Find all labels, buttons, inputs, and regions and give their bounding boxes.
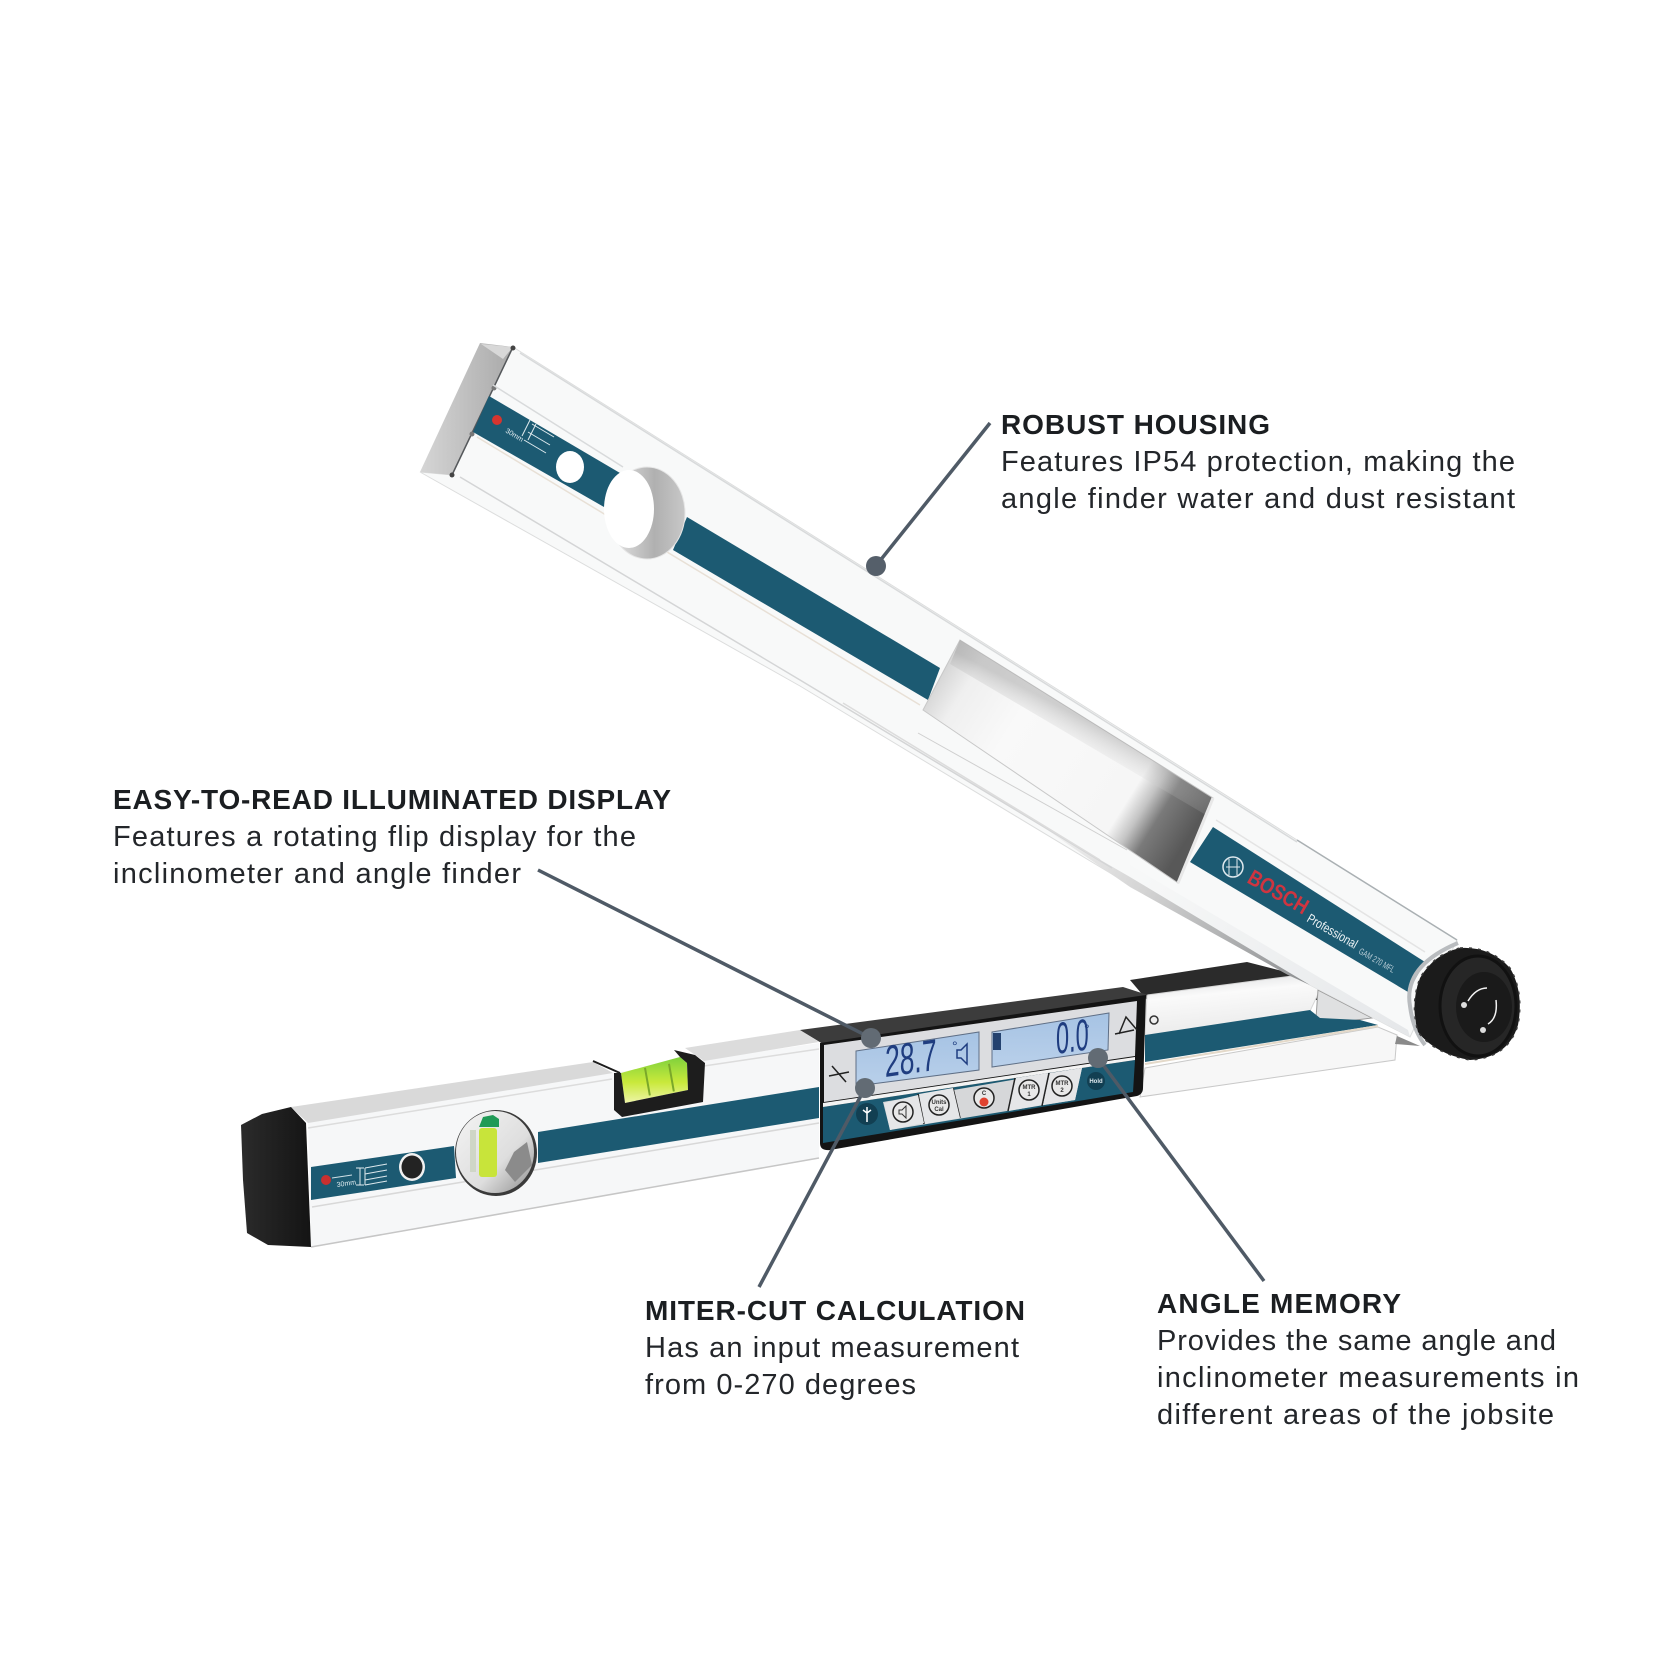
- upper arm of angle finder: [420, 343, 1520, 1060]
- arm lower face shading: [1130, 865, 1410, 1037]
- callout line: angle memory: [1088, 1048, 1264, 1281]
- small sight hole: [399, 1153, 425, 1181]
- teal brand stripe: Professional: [1304, 911, 1361, 952]
- buttons: MTR: [1056, 1081, 1069, 1087]
- text block: robust housing: ROBUST HOUSING: [1001, 409, 1270, 440]
- text block: miter-cut calculation: MITER-CUT CALCULATION: [645, 1295, 1025, 1326]
- buttons: MTR: [1022, 1085, 1036, 1091]
- callout line: miter-cut calculation: [759, 1078, 875, 1287]
- text block: angle memory: ANGLE MEMORY: [1157, 1288, 1401, 1319]
- black end cap: [241, 1107, 311, 1247]
- large hole: [604, 467, 685, 559]
- buttons: 1: [1027, 1092, 1031, 1098]
- lower arm left body: [291, 1030, 819, 1247]
- lower arm of angle finder: [241, 962, 1420, 1247]
- open end cap: [420, 343, 516, 478]
- display housing: [800, 987, 1148, 1150]
- text block: miter-cut calculation: [645, 1295, 1025, 1401]
- buttons: 2: [1060, 1088, 1064, 1094]
- text block: robust housing: Features IP54 protection, making the: [1001, 446, 1515, 478]
- LCD screen left: °: [952, 1038, 958, 1054]
- text block: easy-to-read illuminated display: Features a rotating flip display for the: [113, 821, 636, 853]
- text block: angle memory: Provides the same angle and: [1157, 1325, 1556, 1357]
- callout line: illuminated display: [538, 870, 881, 1048]
- LCD screen right: °: [1084, 1021, 1090, 1037]
- knob: [1409, 943, 1520, 1060]
- LCD screen right: 0.0: [1056, 1010, 1089, 1064]
- rectangular bubble vial: [593, 1050, 705, 1117]
- text block: angle memory: inclinometer measurements in: [1157, 1362, 1579, 1394]
- laser marking: [321, 1164, 387, 1189]
- display silver panel: [824, 1001, 1137, 1102]
- LCD screen left: [856, 1031, 979, 1087]
- LCD screen right: [992, 1010, 1109, 1067]
- text block: angle memory: different areas of the jobsite: [1157, 1399, 1554, 1431]
- buttons: C: [982, 1091, 987, 1097]
- text block: miter-cut calculation: Has an input measurement: [645, 1332, 1019, 1364]
- teal button strip: [823, 1057, 1135, 1143]
- text block: easy-to-read illuminated display: inclinometer and angle finder: [113, 858, 521, 890]
- buttons: Units: [932, 1100, 947, 1106]
- round bubble vial: [455, 1110, 537, 1196]
- buttons: [856, 1072, 1105, 1125]
- lower arm right section: [1130, 962, 1420, 1097]
- text block: miter-cut calculation: from 0-270 degrees: [645, 1369, 916, 1401]
- text block: robust housing: angle finder water and dust resistant: [1001, 483, 1515, 515]
- buttons: Cal: [934, 1107, 944, 1113]
- LCD screen left: 28.7: [885, 1031, 936, 1087]
- text block: easy-to-read illuminated display: [113, 784, 671, 890]
- teal brand stripe: BOSCH: [1244, 865, 1313, 919]
- buttons: Hold: [1089, 1079, 1103, 1085]
- silver window: [923, 640, 1213, 883]
- teal brand stripe: GAM 270 MFL: [1357, 946, 1397, 975]
- callout line: robust housing: [866, 423, 990, 576]
- text block: robust housing: [1001, 409, 1515, 515]
- arm body: [420, 347, 1457, 1037]
- teal brand stripe: [1190, 827, 1425, 992]
- teal stripe with holes: [473, 396, 940, 700]
- teal stripe with holes: 30mm: [504, 428, 524, 444]
- mode symbols: [829, 1017, 1137, 1082]
- laser marking: 30mm: [336, 1179, 357, 1189]
- arm profile lines: [460, 353, 1457, 952]
- text block: angle memory: [1157, 1288, 1579, 1431]
- text block: easy-to-read illuminated display: EASY-TO-READ ILLUMINATED DISPLAY: [113, 784, 671, 815]
